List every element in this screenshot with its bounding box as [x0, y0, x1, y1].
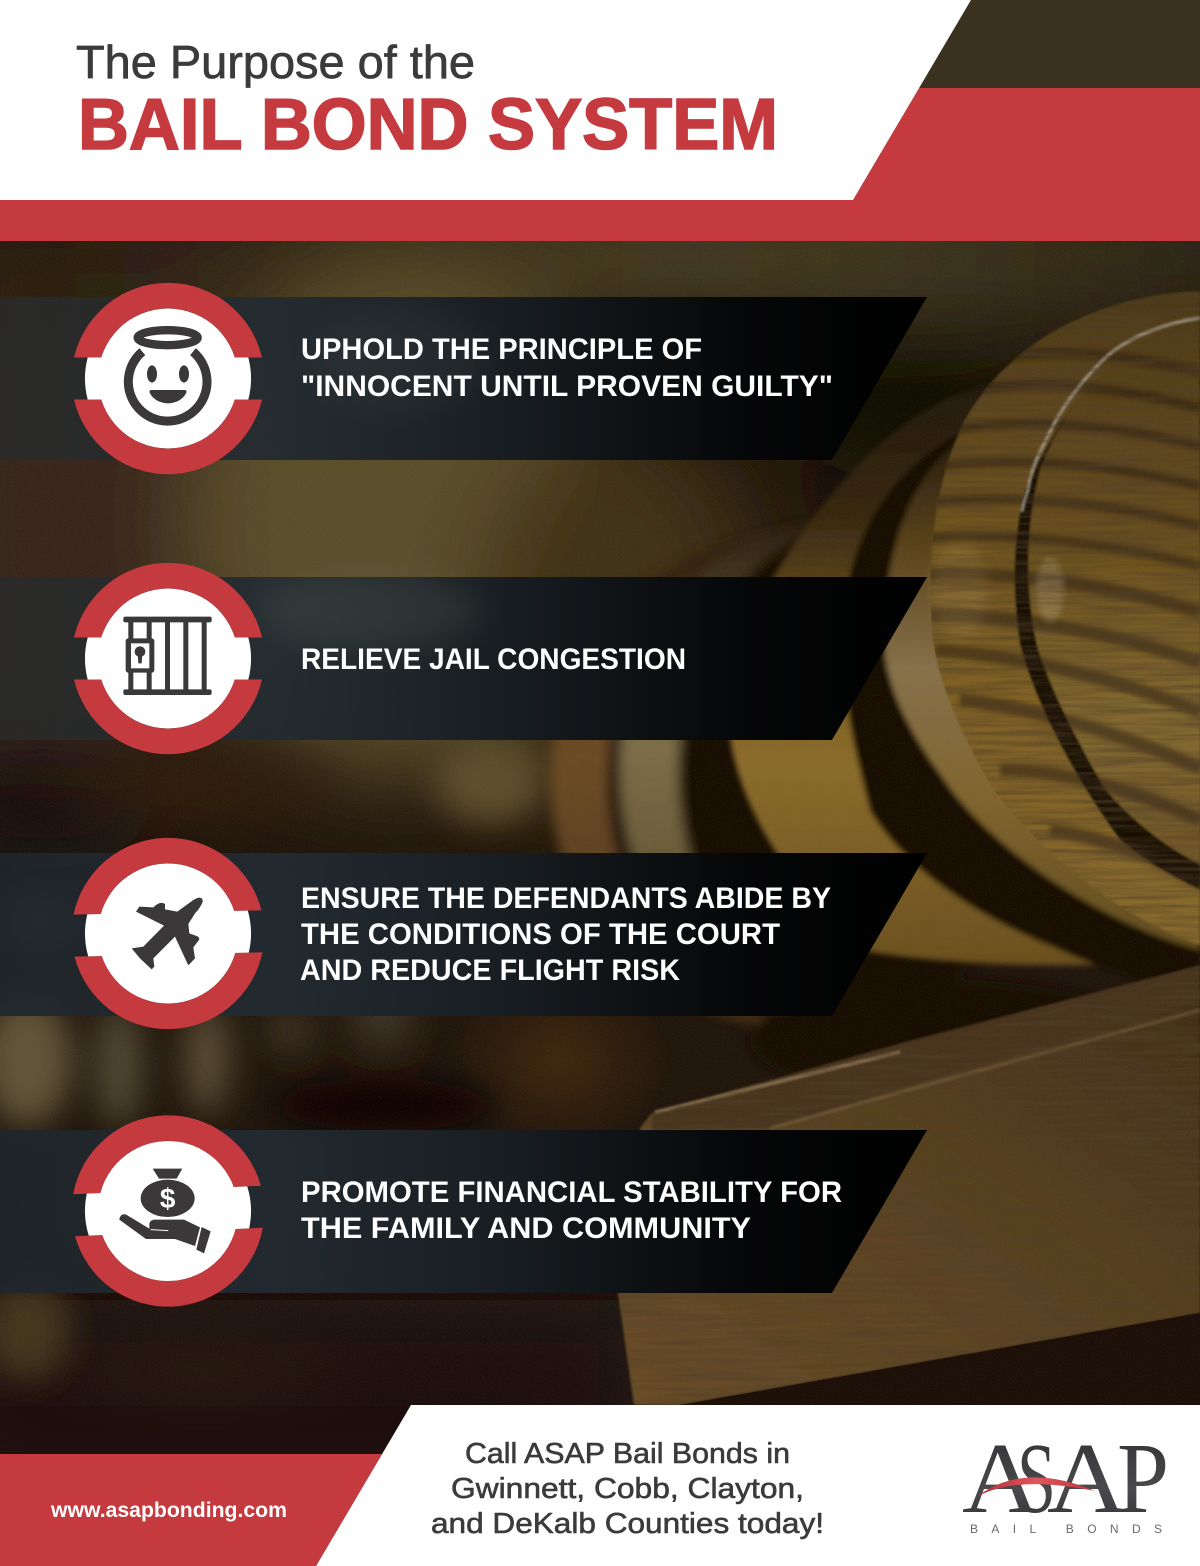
- text: court conditions: AND REDUCE FLIGHT RISK: [300, 954, 681, 987]
- panel: relieve jail congestion: [0, 563, 927, 754]
- icon: hand holding money bag: $: [160, 1183, 176, 1214]
- footer: white panel: [316, 1405, 1200, 1566]
- logo: ASAP Bail Bonds: P: [1117, 1422, 1169, 1534]
- header: white title panel: [0, 0, 971, 200]
- title: The Purpose of the: [76, 36, 475, 88]
- icon: smiling face with halo: [128, 330, 207, 421]
- panel: financial stability: [0, 1111, 927, 1311]
- text: court conditions: ENSURE THE DEFENDANTS ABIDE BY: [301, 882, 831, 915]
- icon: airplane: [132, 898, 203, 969]
- text: principle: [301, 333, 833, 403]
- call to action: Gwinnett, Cobb, Clayton,: [451, 1473, 804, 1505]
- panel: innocent until proven guilty: [0, 283, 927, 474]
- title: BAIL BOND SYSTEM: [78, 85, 778, 165]
- logo: ASAP Bail Bonds: [962, 1422, 1169, 1536]
- badge 4: [70, 1111, 266, 1311]
- call to action: Call ASAP Bail Bonds in: [465, 1438, 790, 1470]
- header: red band: [0, 88, 1200, 241]
- header: olive corner: [919, 0, 1200, 88]
- ribbon 4: [0, 1130, 927, 1293]
- logo: ASAP Bail Bonds: BAIL BONDS: [970, 1522, 1162, 1536]
- panel: abide by conditions and reduce flight risk: [0, 836, 927, 1031]
- title: [76, 36, 778, 165]
- text: financial stability: [301, 1176, 842, 1245]
- badge 1: [74, 283, 262, 474]
- website url: www.asapbonding.com: [50, 1499, 287, 1522]
- logo: ASAP Bail Bonds: A: [962, 1422, 1040, 1534]
- text: jail congestion: RELIEVE JAIL CONGESTION: [301, 643, 686, 676]
- ribbon 1: [0, 297, 927, 460]
- ribbon 3: [0, 853, 927, 1016]
- text: financial stability: PROMOTE FINANCIAL STABILITY FOR: [301, 1176, 842, 1209]
- text: principle: "INNOCENT UNTIL PROVEN GUILTY": [301, 370, 833, 403]
- call to action: and DeKalb Counties today!: [431, 1508, 824, 1540]
- background photo: blurred gavel on wooden sound block: [0, 241, 1200, 1406]
- text: court conditions: [300, 882, 831, 987]
- text: financial stability: THE FAMILY AND COMMUNITY: [301, 1212, 751, 1245]
- badge 2: [74, 563, 262, 754]
- logo: ASAP Bail Bonds: A: [1047, 1422, 1127, 1534]
- text: principle: UPHOLD THE PRINCIPLE OF: [301, 333, 702, 366]
- logo: ASAP Bail Bonds: S: [1017, 1422, 1056, 1534]
- footer: red website panel: [0, 1454, 382, 1566]
- badge 3: [72, 836, 264, 1031]
- ribbon 2: [0, 577, 927, 740]
- text: court conditions: THE CONDITIONS OF THE COURT: [301, 918, 780, 951]
- icon: hand holding money bag: [119, 1169, 211, 1253]
- icon: jail cell bars: [123, 617, 212, 695]
- call to action: [431, 1438, 824, 1540]
